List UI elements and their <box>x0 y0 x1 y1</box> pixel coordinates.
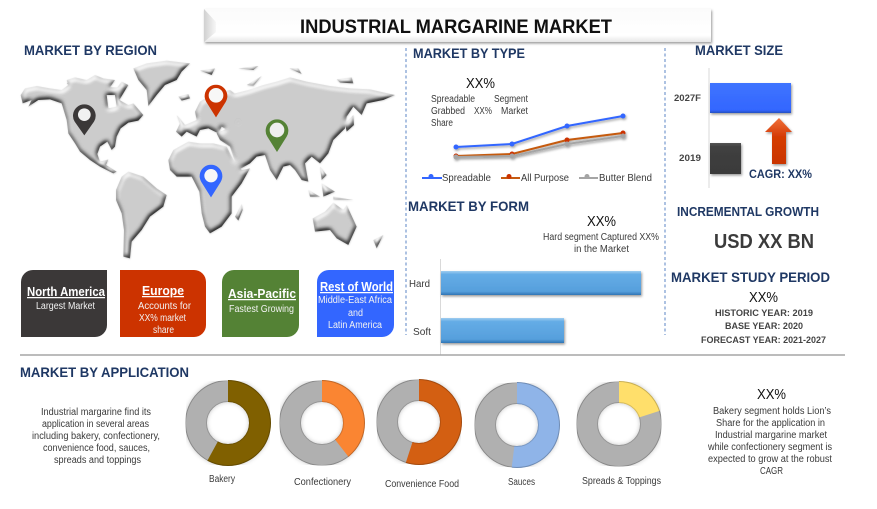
label: confectionery: Confectionery <box>294 477 351 488</box>
heading: market study period: MARKET STUDY PERIOD <box>671 269 830 285</box>
bar chart: market by form <box>409 259 641 355</box>
panel: north america <box>21 270 107 337</box>
donut: sauces <box>474 382 560 468</box>
text block: application summary: XX% <box>757 386 786 403</box>
label: cagr: CAGR: XX% <box>749 169 812 181</box>
line chart: market by type <box>454 114 626 160</box>
bar chart: market by form: Soft <box>413 327 431 338</box>
value: incremental growth: USD XX BN <box>714 231 814 253</box>
world map <box>21 61 395 258</box>
panel: rest of world: Rest of World <box>320 280 393 294</box>
callout: type share: Share <box>431 118 453 129</box>
callout: type share: XX% <box>474 106 492 117</box>
panel: europe: Accounts for <box>138 301 192 312</box>
panel: asia pacific: Fastest Growing <box>229 304 294 315</box>
text block: application intro: Industrial margarine find its <box>41 407 151 418</box>
chart legend: All Purpose <box>521 173 569 184</box>
icon: rest of world pin <box>200 165 222 197</box>
icon: asia pacific pin <box>266 119 288 152</box>
label: bakery: Bakery <box>209 474 235 485</box>
panel: europe <box>120 270 206 337</box>
panel: rest of world: Latin America <box>328 320 382 331</box>
panel: north america: Largest Market <box>36 301 95 312</box>
text block: application summary: while confectionery segment is <box>707 442 832 453</box>
text block: application intro: convenience food, sauces, <box>43 443 150 454</box>
text block: application intro: including bakery, confectionery, <box>32 431 160 442</box>
panel: asia pacific <box>222 270 299 337</box>
callout: form share: Hard segment Captured XX% <box>543 232 659 243</box>
text block: application summary: Industrial margarine market <box>715 430 827 441</box>
bar chart: market size <box>674 68 791 188</box>
heading: incremental growth: INCREMENTAL GROWTH <box>677 205 819 219</box>
panel: europe: share <box>153 325 174 336</box>
text block: application intro: spreads and toppings <box>54 455 141 466</box>
arrow: growth <box>765 118 792 164</box>
donut: convenience food <box>376 380 462 464</box>
label: spreads and toppings: Spreads & Toppings <box>582 476 661 487</box>
panel: rest of world: Middle-East Africa <box>318 295 392 306</box>
panel: europe: Europe <box>142 284 184 298</box>
label: sauces: Sauces <box>508 477 535 488</box>
donut: spreads and toppings <box>576 382 662 466</box>
text block: application summary: CAGR <box>760 466 783 477</box>
chart legend: Spreadable <box>442 173 491 184</box>
chart legend: Butter Blend <box>599 173 652 184</box>
chart legend <box>422 173 652 184</box>
study period details: FORECAST YEAR: 2021-2027 <box>701 335 826 346</box>
icon: north america pin <box>73 104 96 135</box>
text block: application summary: Bakery segment holds Lion’s <box>713 406 831 417</box>
callout: type share: XX% <box>466 75 495 92</box>
heading: market by type: MARKET BY TYPE <box>413 45 525 61</box>
callout: form share: in the Market <box>574 244 629 255</box>
panel: asia pacific: Asia-Pacific <box>228 287 296 301</box>
text block: application summary: expected to grow at the robust <box>708 454 832 465</box>
panel: europe: XX% market <box>139 313 186 324</box>
panel: rest of world: and <box>348 308 363 319</box>
bar chart: market size: 2027F <box>674 93 701 104</box>
text block: application summary <box>707 386 832 477</box>
text block: application intro: application in several areas <box>42 419 149 430</box>
study period details: XX% <box>749 289 778 306</box>
heading: market by region: MARKET BY REGION <box>24 42 157 58</box>
heading: market by form: MARKET BY FORM <box>408 198 529 214</box>
callout: type share: Market <box>501 106 528 117</box>
panel: north america: North America <box>27 285 106 299</box>
callout: type share <box>431 75 528 129</box>
callout: type share: Segment <box>494 94 528 105</box>
bar chart: market by form: Hard <box>409 279 430 290</box>
callout: type share: Grabbed <box>431 106 465 117</box>
title banner <box>204 9 711 42</box>
callout: form share: XX% <box>587 213 616 230</box>
text block: application summary: Share for the application in <box>716 418 825 429</box>
label: convenience food: Convenience Food <box>385 479 459 490</box>
callout: type share: Spreadable <box>431 94 475 105</box>
panel: rest of world <box>317 270 394 337</box>
callout: form share <box>543 213 659 255</box>
title banner: INDUSTRIAL MARGARINE MARKET <box>300 16 612 38</box>
icon: europe pin <box>205 85 227 117</box>
text block: application intro <box>32 407 160 466</box>
donut: bakery <box>186 380 270 466</box>
study period details <box>701 289 826 346</box>
study period details: HISTORIC YEAR: 2019 <box>715 308 813 319</box>
study period details: BASE YEAR: 2020 <box>725 321 803 332</box>
bar chart: market size: 2019 <box>679 153 701 164</box>
donut: confectionery <box>280 380 364 466</box>
heading: market by application: MARKET BY APPLICATION <box>20 364 189 380</box>
heading: market size: MARKET SIZE <box>695 42 783 58</box>
